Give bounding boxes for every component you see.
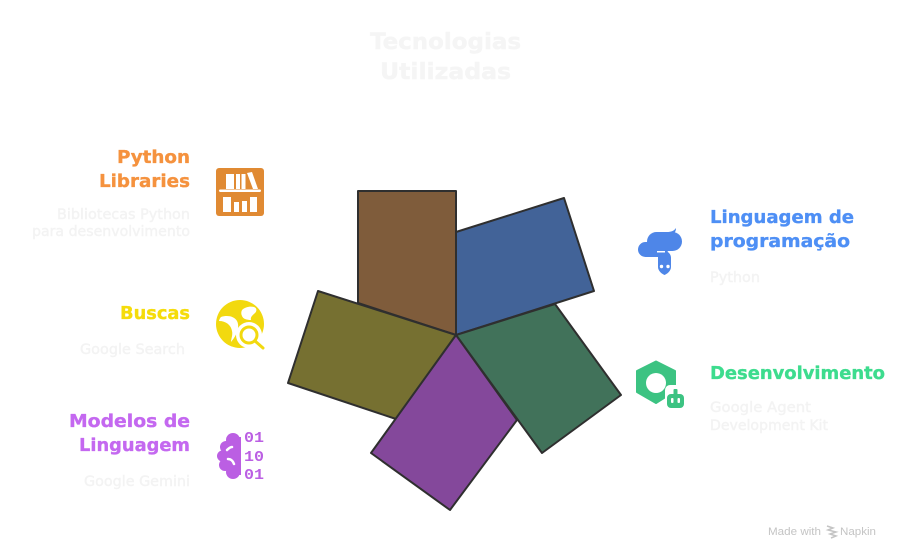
heading: Desenvolvimento: Desenvolvimento bbox=[710, 363, 885, 384]
heading: Modelos de Linguagem bbox=[69, 411, 190, 456]
icon: globe with magnifier bbox=[216, 300, 264, 348]
icon: bookshelf bbox=[216, 168, 264, 216]
description: Python: Python bbox=[710, 270, 760, 286]
description: Google Agent Development Kit: Google Agent bbox=[710, 400, 812, 416]
heading: Linguagem de programação: programação bbox=[710, 231, 850, 252]
description: Google Gemini: Google Gemini bbox=[84, 474, 190, 490]
heading: Buscas: Buscas bbox=[120, 303, 190, 324]
icon: hexagon nut with robot bbox=[637, 362, 687, 410]
title bbox=[370, 30, 521, 85]
segment: Modelos de Linguagem (purple) bbox=[371, 335, 517, 510]
footer: Made with Napkin bbox=[768, 526, 876, 538]
icon: snake bbox=[638, 228, 682, 275]
icon: brain with binary digits bbox=[217, 430, 264, 484]
title: Utilizadas bbox=[380, 60, 511, 85]
segment: Desenvolvimento (green) bbox=[456, 304, 621, 453]
panel: Desenvolvimento bbox=[637, 362, 885, 434]
panel: Buscas bbox=[80, 300, 264, 358]
heading: Linguagem de programação: Linguagem de bbox=[710, 207, 854, 228]
icon: brain with binary digits: 01 bbox=[244, 467, 264, 484]
heading: Linguagem de programação bbox=[710, 207, 854, 252]
panel: Python Libraries bbox=[32, 147, 264, 240]
description: Bibliotecas Python bbox=[32, 207, 190, 240]
heading: Modelos de Linguagem: Modelos de bbox=[69, 411, 190, 432]
icon: brain with binary digits: 10 bbox=[244, 449, 264, 466]
footer: Made with Napkin: Napkin bbox=[840, 526, 876, 538]
heading: Python Libraries: Libraries bbox=[99, 171, 190, 192]
description: Google Agent Development Kit bbox=[710, 400, 829, 434]
segment: Linguagem de programação (blue) bbox=[456, 198, 594, 335]
panel: Linguagem de programação bbox=[638, 207, 854, 286]
pentagonal diagram bbox=[288, 191, 621, 510]
description: Google Agent Development Kit: Development Kit bbox=[710, 418, 829, 434]
footer: Made with Napkin: Made with bbox=[768, 526, 821, 538]
segment: Buscas (olive) bbox=[288, 291, 456, 419]
description: Bibliotecas Python: para desenvolvimento bbox=[32, 224, 190, 240]
title: Tecnologias bbox=[370, 30, 521, 55]
description: Google Search: Google Search bbox=[80, 342, 185, 358]
heading: Modelos de Linguagem: Linguagem bbox=[79, 435, 190, 456]
heading: Python Libraries: Python bbox=[117, 147, 190, 168]
heading: Python Libraries bbox=[99, 147, 190, 192]
segment: Python Libraries (brown) bbox=[358, 191, 456, 335]
description: Bibliotecas Python: Bibliotecas Python bbox=[57, 207, 190, 223]
icon: brain with binary digits: 01 bbox=[244, 430, 264, 447]
panel: Modelos de Linguagem bbox=[69, 411, 264, 490]
